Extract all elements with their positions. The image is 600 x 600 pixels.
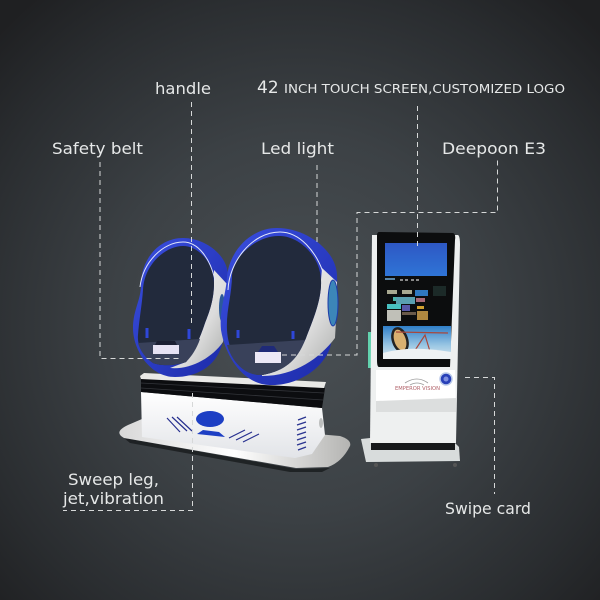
- leader: handle to sweep leg: [190, 102, 192, 323]
- kiosk: touch screen machine: [361, 232, 460, 467]
- app tiles: [385, 278, 446, 321]
- side emblem: [328, 280, 338, 326]
- leader: led light: [316, 165, 318, 243]
- kiosk stand: [361, 438, 460, 462]
- kiosk brand logo: [395, 379, 440, 392]
- handles right: [238, 330, 293, 339]
- platform: floor plate of the egg chairs: [119, 419, 350, 472]
- label: touch screen heading: INCH TOUCH SCREEN,CUSTOMIZED LOGO: [284, 81, 565, 96]
- label: touch screen heading: 42: [257, 78, 279, 98]
- leader: touch screen: [416, 106, 418, 250]
- dashed leader lines: [63, 102, 498, 510]
- egg chair: left: [133, 238, 228, 377]
- kiosk brand logo: EMPEROR VISION: [395, 386, 440, 392]
- base black band: [141, 378, 325, 408]
- side vents: [297, 417, 306, 450]
- left stripes: [167, 417, 192, 432]
- egg chair: right: [221, 228, 338, 385]
- upper blue screen: [385, 243, 447, 276]
- logo emblem: [196, 411, 224, 427]
- label: swipe card: Swipe card: [445, 499, 531, 518]
- kiosk green glow: [368, 332, 372, 368]
- label: handle: handle: [155, 79, 211, 98]
- base body white box: [141, 392, 325, 458]
- headset left: [153, 345, 179, 354]
- kiosk body: [370, 235, 460, 443]
- lower image: ride photo: [383, 326, 451, 359]
- card reader: [440, 373, 452, 385]
- leader: swipe card: [465, 378, 494, 494]
- label: deepoon e3: Deepoon E3: [442, 139, 546, 158]
- label: led light: Led light: [261, 139, 334, 158]
- label: safety belt: Safety belt: [52, 139, 143, 158]
- base top plate: [140, 373, 326, 388]
- right stripes: [229, 430, 259, 442]
- leader: seat to deepoon: [282, 160, 498, 355]
- headset right: [255, 352, 281, 363]
- kiosk black screen: [377, 232, 455, 367]
- label: jet vibration: jet,vibration: [62, 489, 164, 508]
- leader: safety belt: [100, 162, 180, 358]
- label: sweep leg: Sweep leg,: [68, 470, 159, 489]
- handles left: [147, 328, 189, 339]
- base: body with blue logo: [140, 373, 326, 458]
